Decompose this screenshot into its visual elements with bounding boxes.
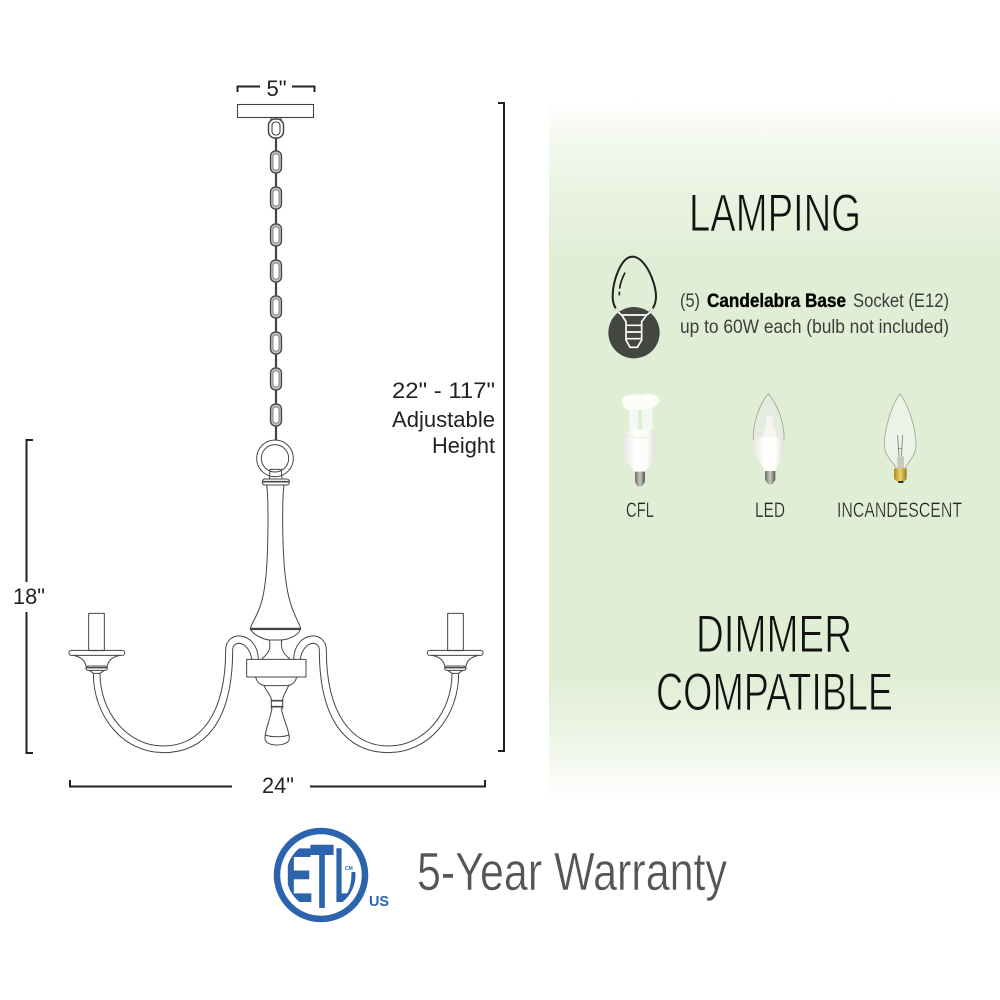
right arm bbox=[294, 613, 483, 753]
bulb type labels bbox=[626, 499, 962, 522]
adjustable height label: 22" - 117" bbox=[392, 378, 495, 403]
dimension: 24 inch width bbox=[70, 773, 485, 798]
bulb: LED bbox=[753, 394, 784, 484]
dimension: adjustable height bracket bbox=[498, 103, 504, 751]
bulb type labels: LED bbox=[755, 499, 785, 522]
heading: dimmer compatible: COMPATIBLE bbox=[656, 663, 893, 722]
dimension: 24 inch width: 24" bbox=[262, 773, 294, 798]
icon: ETL US certification mark: CM bbox=[345, 866, 353, 872]
adjustable height label: Adjustable bbox=[392, 407, 495, 432]
ceiling plate and chain bbox=[238, 104, 314, 440]
icon: ETL US certification mark: E bbox=[285, 831, 313, 919]
icon: ETL US certification mark: T bbox=[310, 826, 334, 928]
heading: dimmer compatible: DIMMER bbox=[696, 605, 852, 664]
adjustable height label bbox=[392, 378, 495, 458]
heading: lamping: LAMPING bbox=[689, 184, 861, 243]
chandelier body drawing bbox=[69, 440, 483, 753]
icon: candelabra bulb bbox=[608, 257, 660, 358]
icon: ETL US certification mark: L bbox=[334, 831, 356, 919]
bulb: CFL bbox=[622, 394, 659, 486]
panel: lamping background bbox=[549, 100, 1000, 800]
icon: ETL US certification mark: US bbox=[369, 894, 389, 910]
bulb type labels: CFL bbox=[626, 499, 654, 522]
candelabra socket description: Candelabra Base bbox=[707, 290, 846, 312]
candelabra socket description: Socket (E12) bbox=[853, 290, 949, 312]
candelabra socket description: up to 60W each (bulb not included) bbox=[680, 316, 949, 338]
dimension: 5 inch canopy bbox=[238, 76, 314, 101]
left arm bbox=[69, 613, 258, 753]
candelabra socket description: (5) bbox=[680, 290, 700, 312]
warranty text: 5-Year Warranty bbox=[417, 842, 727, 902]
dimension: 18 inch body height bbox=[13, 440, 45, 753]
adjustable height label: Height bbox=[432, 433, 495, 458]
candelabra socket description bbox=[680, 290, 949, 338]
bulb: incandescent bbox=[884, 394, 916, 483]
dimension: 5 inch canopy: 5" bbox=[266, 76, 287, 101]
bulb type labels: INCANDESCENT bbox=[837, 499, 962, 522]
heading: dimmer compatible bbox=[656, 605, 893, 722]
icon: ETL US certification mark bbox=[277, 826, 389, 928]
dimension: 18 inch body height: 18" bbox=[13, 584, 45, 609]
